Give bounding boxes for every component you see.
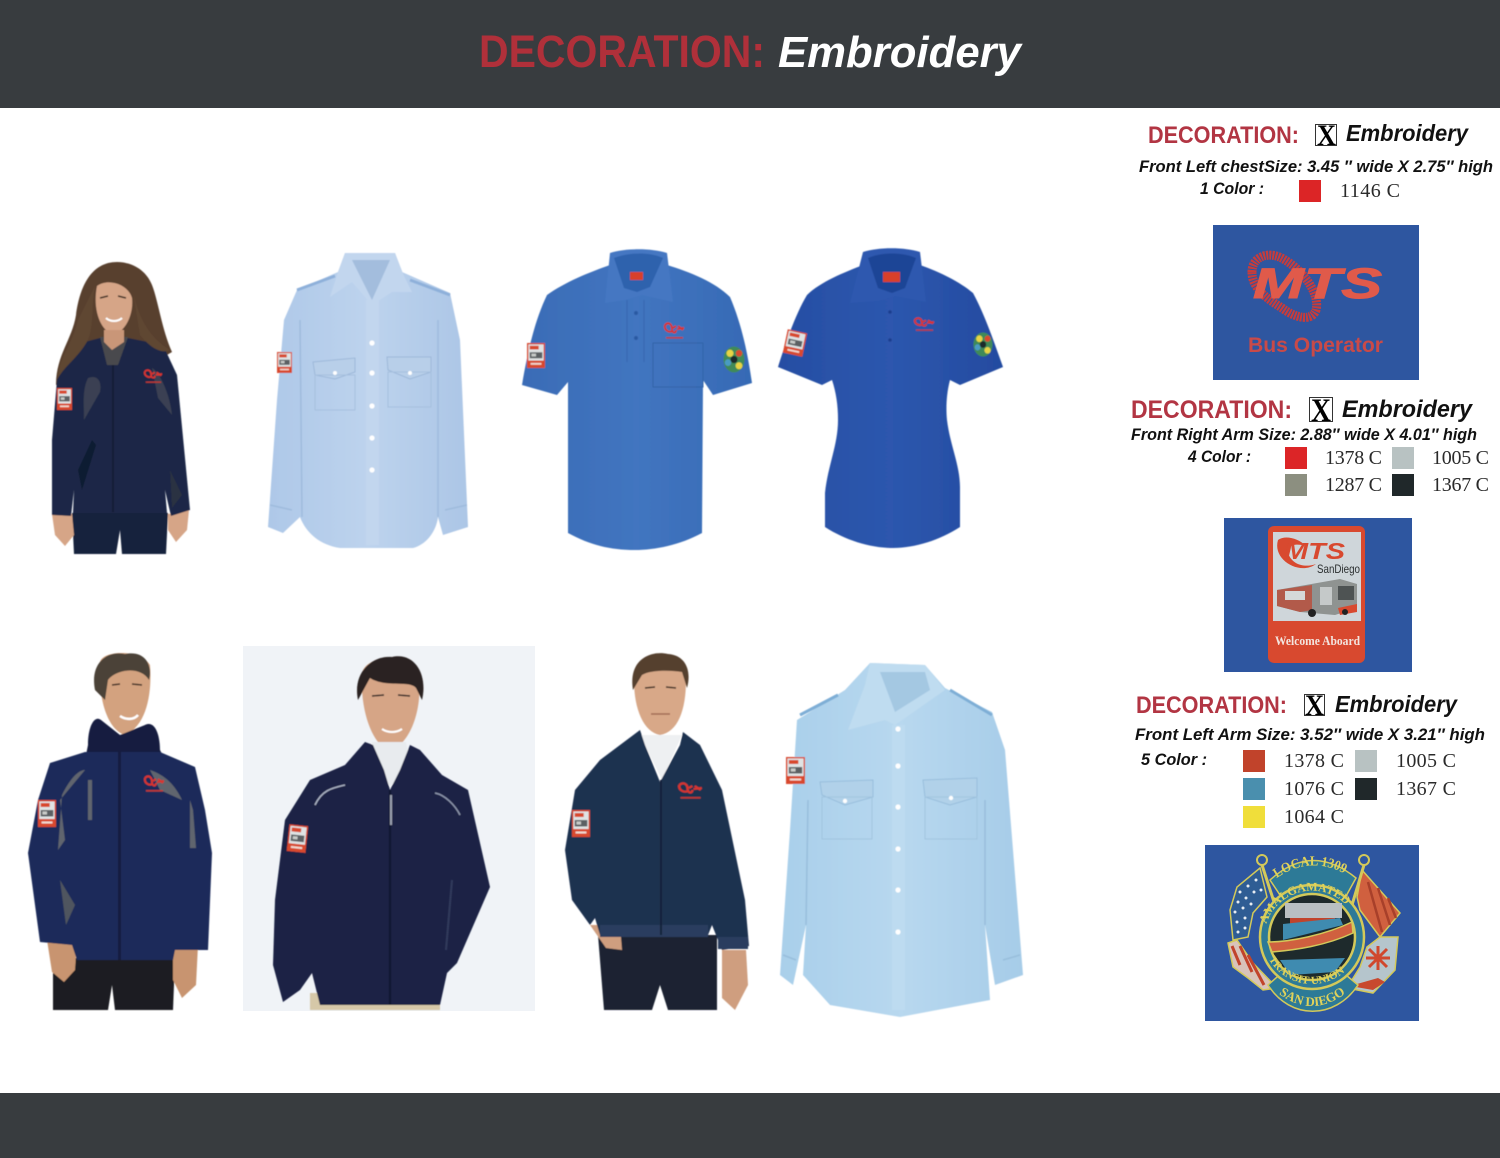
swatch 1378 C <box>1285 447 1382 469</box>
decoration block 2: front right arm <box>1131 393 1489 496</box>
decoration block 1: front left chest <box>1139 119 1493 202</box>
color count 1: 1 Color : <box>1200 179 1264 198</box>
method label 3: Embroidery <box>1335 691 1458 717</box>
swatch 1064 C: 1064 C <box>1284 806 1344 828</box>
swatch 1287 C: 1287 C <box>1325 474 1382 496</box>
heading 2: DECORATION: <box>1131 396 1292 424</box>
size text 2: Front Right Arm Size: 2.88″ wide X 4.01″ high <box>1131 425 1477 444</box>
garment: man in navy parka <box>28 653 212 1010</box>
embroidery sample: Local 1309 union badge: SAN DIEGO <box>1280 988 1344 1006</box>
heading 1: DECORATION: <box>1148 122 1299 149</box>
checkbox 3: X <box>1305 689 1324 722</box>
embroidery sample: MTS Welcome Aboard patch: MTS <box>1284 538 1346 564</box>
embroidery sample: MTS Bus Operator: Bus Operator <box>1248 334 1383 357</box>
checkbox 1: X <box>1317 119 1336 152</box>
photo backdrop: man in dark jacket <box>243 646 535 1011</box>
embroidery sample: MTS Bus Operator: MTS <box>1253 260 1382 308</box>
embroidery sample: MTS Welcome Aboard patch: SanDiego <box>1317 562 1360 576</box>
header band <box>0 0 1500 108</box>
embroidery sample: MTS Welcome Aboard patch <box>1224 518 1412 672</box>
embroidery sample: Local 1309 union badge: LOCAL 1309 <box>1272 856 1347 878</box>
embroidery sample: MTS Welcome Aboard patch: Welcome Aboard <box>1275 633 1361 648</box>
swatch 1064 C <box>1243 806 1344 828</box>
swatch 1367 C <box>1355 778 1456 800</box>
checkbox 2: X <box>1311 393 1331 429</box>
title <box>479 26 1024 77</box>
swatch 1076 C: 1076 C <box>1284 778 1344 800</box>
size text 1: Front Left chestSize: 3.45 ″ wide X 2.75″ high <box>1139 157 1493 176</box>
swatch 1367 C: 1367 C <box>1432 474 1489 496</box>
embroidery sample: MTS Bus Operator <box>1213 225 1419 380</box>
color count 3: 5 Color : <box>1141 750 1207 769</box>
swatch 1287 C <box>1285 474 1382 496</box>
method label 1: Embroidery <box>1346 120 1469 146</box>
title: Embroidery <box>778 28 1024 77</box>
swatch 1005 C: 1005 C <box>1396 750 1456 772</box>
method label 2: Embroidery <box>1342 396 1474 423</box>
swatch 1146 C: 1146 C <box>1340 180 1400 202</box>
swatch 1005 C: 1005 C <box>1432 447 1489 469</box>
garment: light blue men's shirt <box>780 663 1023 1017</box>
garment: man in dark zip jacket <box>273 656 490 1010</box>
garment: light blue women's shirt <box>268 253 468 548</box>
embroidery sample: Local 1309 union badge <box>1205 845 1419 1021</box>
garment: woman in navy jacket <box>52 262 190 554</box>
garment: man in navy bomber jacket <box>565 653 749 1010</box>
color count 2: 4 Color : <box>1187 447 1251 466</box>
swatch 1076 C <box>1243 778 1344 800</box>
footer band <box>0 1093 1500 1158</box>
swatch 1367 C: 1367 C <box>1396 778 1456 800</box>
embroidery sample: Local 1309 union badge: TRANSIT UNION <box>1270 955 1344 984</box>
swatch 1367 C <box>1392 474 1489 496</box>
garment: blue women's polo <box>778 248 1003 548</box>
embroidery sample: Local 1309 union badge: AMALGAMATED <box>1260 882 1350 924</box>
swatch 1005 C <box>1392 447 1489 469</box>
swatch 1378 C: 1378 C <box>1325 447 1382 469</box>
decoration block 3: front left arm <box>1135 689 1485 828</box>
title: DECORATION: <box>479 26 765 77</box>
swatch 1378 C: 1378 C <box>1284 750 1344 772</box>
garment: blue men's polo <box>522 249 752 550</box>
swatch 1005 C <box>1355 750 1456 772</box>
swatch 1146 C <box>1299 180 1400 202</box>
heading 3: DECORATION: <box>1136 692 1287 719</box>
swatch 1378 C <box>1243 750 1344 772</box>
size text 3: Front Left Arm Size: 3.52″ wide X 3.21″ high <box>1135 725 1485 744</box>
